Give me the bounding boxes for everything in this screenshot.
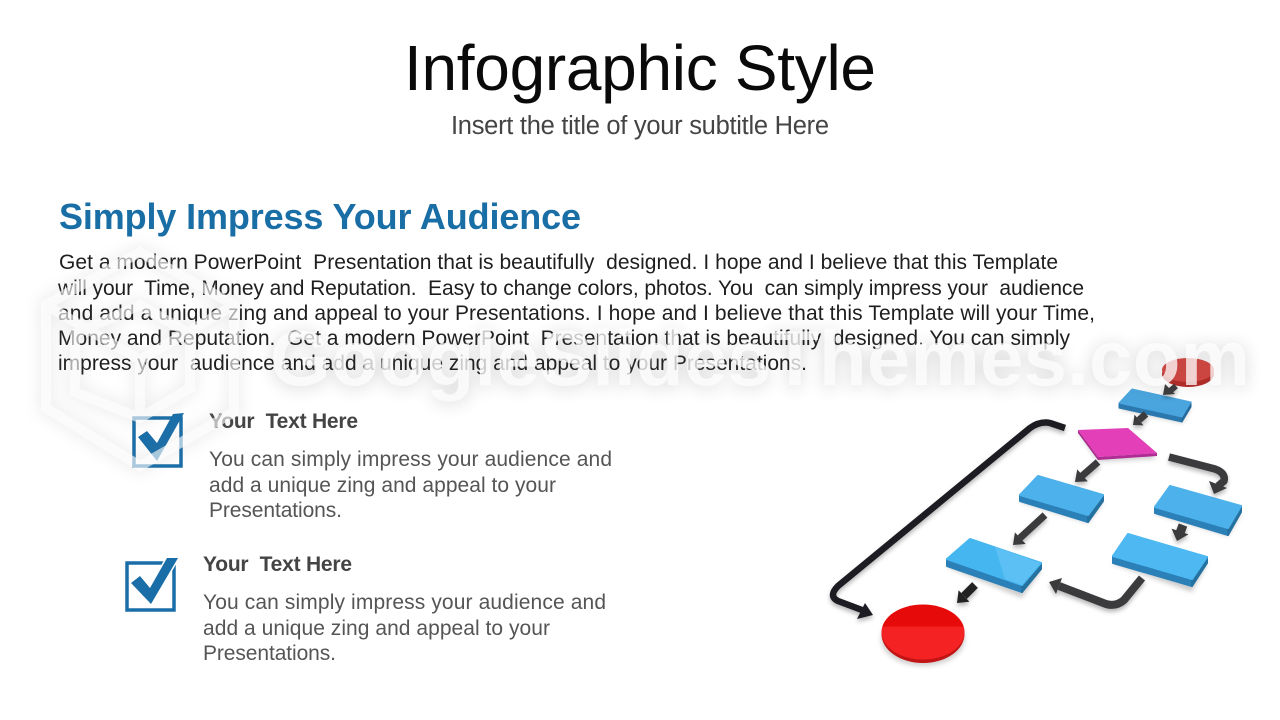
text block 1: You can simply impress your audience and [209, 448, 612, 471]
text block 1: add a unique zing and appeal to your [209, 474, 556, 497]
start oval [1162, 358, 1214, 387]
process box 4 [1113, 534, 1207, 592]
body paragraph: Money and Reputation. Get a modern PowerPoint Presentation that is beautifully designed. You can simply [58, 327, 1070, 350]
process box 3 [1155, 486, 1241, 536]
end circle [881, 604, 965, 666]
watermark text: GoogleSlidesThemes.com [270, 316, 1250, 404]
text block 2: Presentations. [203, 642, 336, 665]
decision diamond [1078, 428, 1157, 462]
arrows [833, 384, 1227, 619]
process box 5 [947, 539, 1041, 598]
process box 2 [1020, 476, 1103, 523]
text block 2: add a unique zing and appeal to your [203, 617, 550, 640]
text block 1: Your Text Here [209, 410, 358, 433]
section heading: Simply Impress Your Audience [59, 196, 581, 237]
watermark text: GoogleSlidesThemes.com [270, 314, 1250, 402]
text block 2: You can simply impress your audience and [203, 591, 606, 614]
text block 1 [209, 410, 612, 522]
title: Infographic Style [404, 32, 876, 104]
text block 2: Your Text Here [203, 553, 352, 576]
watermark [46, 252, 1250, 466]
body paragraph: Get a modern PowerPoint Presentation that is beautifully designed. I hope and I believe that this Template [59, 251, 1058, 274]
body paragraph [57, 251, 1095, 375]
text block 1: Presentations. [209, 499, 342, 522]
body paragraph: and add a unique zing and appeal to your Presentations. I hope and I believe that this Template will your Time, [58, 302, 1095, 325]
icon: checkbox 1 [134, 413, 184, 466]
process box 1 [1119, 389, 1191, 423]
flowchart diagram [833, 358, 1241, 666]
body paragraph: will your Time, Money and Reputation. Easy to change colors, photos. You can simply impress your audience [57, 277, 1084, 300]
watermark logo [46, 252, 234, 466]
icon: checkbox 2 [127, 558, 178, 610]
text block 2 [203, 553, 606, 665]
subtitle: Insert the title of your subtitle Here [451, 112, 829, 140]
body paragraph: impress your audience and add a unique zing and appeal to your Presentations. [58, 352, 807, 375]
